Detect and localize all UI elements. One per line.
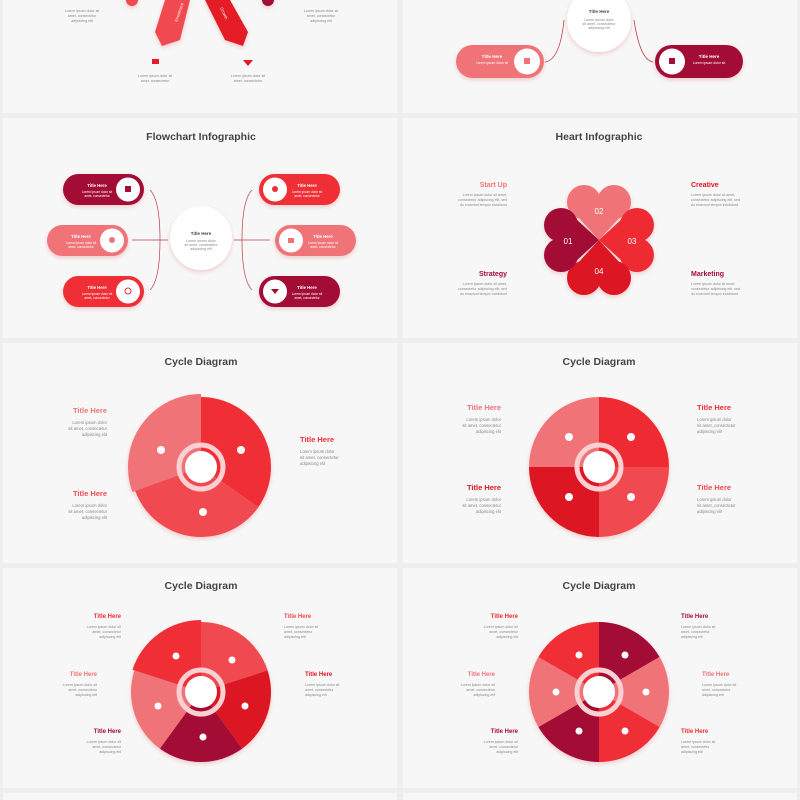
panel: ribbon top-left: Lorem ipsum dolor sit xyxy=(65,9,99,13)
panel: flowchart: Title Here xyxy=(191,231,212,236)
panel: cycle 6: Lorem ipsum dolor sit xyxy=(681,625,715,629)
panel: flowchart: amet, consectetur xyxy=(84,296,111,300)
panel: heart infographic: Lorem ipsum dolor sit amet, xyxy=(463,282,507,286)
panel: flowchart: amet, consectetur xyxy=(294,296,321,300)
icons xyxy=(152,59,159,64)
panel: cycle 3: adipiscing elit xyxy=(300,461,326,466)
title: Cycle Diagram xyxy=(563,580,635,592)
panel: ribbon top-left: adipiscing elit xyxy=(71,19,93,23)
panel: cycle 4: Lorem ipsum dolor xyxy=(697,497,732,502)
panel: top-right pills: adipiscing elit xyxy=(588,26,610,30)
panel: heart infographic: Lorem ipsum dolor sit amet, xyxy=(691,193,735,197)
panel: cycle 6: Lorem ipsum dolor sit xyxy=(484,625,518,629)
panel: cycle 5: Title Here xyxy=(305,672,333,678)
panel: cycle 3: sit amet, consectetur xyxy=(68,426,108,431)
panel: cycle 5: Title Here xyxy=(94,729,122,735)
panel: flowchart: Lorem ipsum dolor sit xyxy=(292,190,322,194)
panel: cycle 6: adipiscing elit xyxy=(681,635,703,639)
connectors xyxy=(132,190,270,290)
panel: cycle 3: Title Here xyxy=(73,406,107,415)
panel: cycle 6: Lorem ipsum dolor sit xyxy=(461,683,495,687)
heart labels: Start Up xyxy=(480,182,507,189)
panel: cycle 4: Title Here xyxy=(467,483,501,492)
panel: cycle 5: Lorem ipsum dolor sit xyxy=(284,625,318,629)
panel: cycle 3: Title Here xyxy=(73,489,107,498)
panel: heart infographic: consectetur adipiscing elit, sed xyxy=(691,287,740,291)
panel: cycle 3: adipiscing elit xyxy=(82,432,108,437)
panel: heart infographic: do eiusmod tempor incididunt xyxy=(460,292,507,296)
panel: flowchart: Lorem ipsum dolor sit xyxy=(292,292,322,296)
panel: cycle 6: Title Here xyxy=(702,672,730,678)
panel: cycle 6: adipiscing elit xyxy=(681,750,703,754)
panel: cycle 5: Title Here xyxy=(70,672,98,678)
panel: cycle 5: adipiscing elit xyxy=(99,750,121,754)
panel: ribbon top-left: Lorem ipsum dolor sit xyxy=(304,9,338,13)
panel: ribbon top-left: adipiscing elit xyxy=(310,19,332,23)
panel: cycle 4: adipiscing elit xyxy=(697,509,723,514)
panel: ribbon top-left: amet, consectetur xyxy=(141,79,170,83)
title: Cycle Diagram xyxy=(165,356,237,368)
panel: flowchart: adipiscing elit xyxy=(190,247,212,251)
panel: cycle 6: amet, consectetur xyxy=(681,745,710,749)
panel: top-right pills: sit amet, consectetur xyxy=(582,22,616,26)
panel: heart infographic: consectetur adipiscing elit, sed xyxy=(691,198,740,202)
panel: cycle 6: amet, consectetur xyxy=(489,745,519,749)
panel: top-right pills xyxy=(456,0,743,78)
panel: cycle 4: sit amet, consectetur xyxy=(697,423,736,428)
panel: ribbon top-left: Lorem ipsum dolor sit xyxy=(138,74,172,78)
panel: cycle 4: sit amet, consectetur xyxy=(462,503,502,508)
panel: cycle 6: amet, consectetur xyxy=(466,688,496,692)
panel: cycle 5: amet, consectetur xyxy=(92,630,122,634)
panel: heart infographic: do eiusmod tempor incididunt xyxy=(460,203,507,207)
panel: top-right pills: Title Here xyxy=(589,9,610,14)
panel: flowchart: Title Here xyxy=(71,234,91,239)
panel: cycle 6: Lorem ipsum dolor sit xyxy=(484,740,518,744)
panel: ribbon top-left: Investment xyxy=(173,1,185,22)
panel: ribbon top-left: Lorem ipsum dolor sit xyxy=(231,74,265,78)
panel: cycle 6: Title Here xyxy=(491,614,519,620)
panel: flowchart: sit amet, consectetur xyxy=(184,243,218,247)
panel: heart infographic: 04 xyxy=(595,267,604,276)
heart labels xyxy=(479,182,724,278)
panel: heart infographic: Lorem ipsum dolor sit amet, xyxy=(691,282,735,286)
title: Flowchart Infographic xyxy=(146,131,256,143)
panel: cycle 3: sit amet, consectetur xyxy=(300,455,339,460)
panel: flowchart: amet, consectetur xyxy=(294,194,321,198)
panel: cycle 6: Title Here xyxy=(681,614,709,620)
panel: flowchart: Title Here xyxy=(87,285,107,290)
pills xyxy=(47,174,356,307)
panel: flowchart: Lorem ipsum dolor xyxy=(186,239,217,243)
panel: cycle 6: amet, consectetur xyxy=(702,688,731,692)
panel: cycle 5: Title Here xyxy=(284,614,312,620)
heart labels: Marketing xyxy=(691,271,724,278)
panel: cycle 6: Lorem ipsum dolor sit xyxy=(702,683,736,687)
panel: flowchart: Lorem ipsum dolor sit xyxy=(66,241,96,245)
panel: cycle 6: Lorem ipsum dolor sit xyxy=(681,740,715,744)
heart labels: Strategy xyxy=(479,271,507,278)
panel: heart infographic: Lorem ipsum dolor sit amet, xyxy=(463,193,507,197)
center circle xyxy=(567,0,631,52)
panel: cycle 6: Title Here xyxy=(468,672,496,678)
panel: cycle 6: Title Here xyxy=(681,729,709,735)
panel: cycle 6: amet, consectetur xyxy=(489,630,519,634)
panel: flowchart: Title Here xyxy=(87,183,107,188)
panel: cycle 4: sit amet, consectetur xyxy=(462,423,502,428)
panel: cycle 3: Title Here xyxy=(300,435,334,444)
panel: cycle 5: adipiscing elit xyxy=(305,693,327,697)
panel: cycle 4: Lorem ipsum dolor xyxy=(466,417,502,422)
panel: flowchart: Title Here xyxy=(313,234,333,239)
panel: cycle 3: Lorem ipsum dolor xyxy=(300,449,335,454)
panel: flowchart: Lorem ipsum dolor sit xyxy=(308,241,338,245)
panel: cycle 6: adipiscing elit xyxy=(496,750,518,754)
panel: flowchart: amet, consectetur xyxy=(310,245,337,249)
panel: cycle 5: adipiscing elit xyxy=(99,635,121,639)
panel: flowchart: Title Here xyxy=(297,183,317,188)
panel: cycle 5: amet, consectetur xyxy=(284,630,313,634)
panel: cycle 5: Lorem ipsum dolor sit xyxy=(305,683,339,687)
wheel xyxy=(128,394,271,537)
panel: ribbon top-left: amet, consectetur xyxy=(234,79,263,83)
panel: heart infographic: consectetur adipiscing elit, sed xyxy=(458,198,507,202)
panel: heart infographic: 03 xyxy=(628,237,637,246)
panel: flowchart: Lorem ipsum dolor sit xyxy=(82,292,112,296)
panel: cycle 4: adipiscing elit xyxy=(476,509,502,514)
panel: cycle 3: Lorem ipsum dolor xyxy=(72,503,108,508)
panel: cycle 5: adipiscing elit xyxy=(284,635,306,639)
panel: heart infographic: do eiusmod tempor incididunt xyxy=(691,203,738,207)
panel: cycle 6 xyxy=(461,580,736,779)
wheel xyxy=(529,397,669,537)
panel: cycle 6: adipiscing elit xyxy=(702,693,724,697)
panel: flowchart: amet, consectetur xyxy=(68,245,95,249)
wheel xyxy=(508,605,690,779)
panel: cycle 5: amet, consectetur xyxy=(92,745,122,749)
panel: cycle 5: adipiscing elit xyxy=(75,693,97,697)
panel: heart infographic: 02 xyxy=(595,207,604,216)
panel: cycle 4: Title Here xyxy=(467,403,501,412)
panel: ribbon top-left xyxy=(65,0,338,83)
ribbon shapes xyxy=(126,0,274,46)
panel: cycle 5: amet, consectetur xyxy=(68,688,98,692)
panel: cycle 5 xyxy=(63,580,339,788)
panel: cycle 3: adipiscing elit xyxy=(82,515,108,520)
panel: cycle 6: adipiscing elit xyxy=(473,693,495,697)
panel: ribbon top-left: Growth xyxy=(219,6,229,20)
panel: cycle 5: Lorem ipsum dolor sit xyxy=(87,740,121,744)
panel: cycle 4: adipiscing elit xyxy=(697,429,723,434)
panel: cycle 5: amet, consectetur xyxy=(305,688,334,692)
panel: ribbon top-left: amet, consectetur xyxy=(307,14,336,18)
panel: cycle 5: Lorem ipsum dolor sit xyxy=(63,683,97,687)
title: Cycle Diagram xyxy=(563,356,635,368)
panel: top-right pills: Lorem ipsum dolor sit xyxy=(476,61,508,65)
heart clover xyxy=(544,185,654,295)
panel: cycle 6: adipiscing elit xyxy=(496,635,518,639)
panel: cycle 6: Title Here xyxy=(491,729,519,735)
panel: cycle 4: Title Here xyxy=(697,403,731,412)
panel: top-right pills: Title Here xyxy=(482,54,503,59)
panel: cycle 5: Lorem ipsum dolor sit xyxy=(87,625,121,629)
panel: cycle 3 xyxy=(68,356,339,537)
panel: cycle 4: Title Here xyxy=(697,483,731,492)
panel: cycle 3: sit amet, consectetur xyxy=(68,509,108,514)
panel: heart infographic xyxy=(458,131,740,296)
panel: heart infographic: consectetur adipiscing elit, sed xyxy=(458,287,507,291)
panel: cycle 4: adipiscing elit xyxy=(476,429,502,434)
panel: top-right pills: Lorem ipsum dolor xyxy=(584,18,615,22)
panel: cycle 6: amet, consectetur xyxy=(681,630,710,634)
pill right xyxy=(655,45,743,78)
heart labels: Creative xyxy=(691,182,719,189)
panel: cycle 4: Lorem ipsum dolor xyxy=(697,417,732,422)
title: Cycle Diagram xyxy=(165,580,237,592)
panel: ribbon top-left: amet, consectetur xyxy=(68,14,97,18)
panel: flowchart: Lorem ipsum dolor sit xyxy=(82,190,112,194)
panel: heart infographic: do eiusmod tempor incididunt xyxy=(691,292,738,296)
title: Heart Infographic xyxy=(556,131,643,143)
panel: flowchart: Title Here xyxy=(297,285,317,290)
pill left xyxy=(456,45,544,78)
panel: top-right pills: Lorem ipsum dolor sit xyxy=(693,61,725,65)
wheel xyxy=(106,605,288,788)
center circle xyxy=(170,206,232,270)
panel: heart infographic: 01 xyxy=(564,237,573,246)
panel: cycle 4 xyxy=(462,356,736,537)
panel: top-right pills: Title Here xyxy=(699,54,720,59)
panel: flowchart: amet, consectetur xyxy=(84,194,111,198)
panel: cycle 3: Lorem ipsum dolor xyxy=(72,420,108,425)
panel: cycle 4: sit amet, consectetur xyxy=(697,503,736,508)
panel: flowchart xyxy=(47,131,356,307)
panel: cycle 4: Lorem ipsum dolor xyxy=(466,497,502,502)
panel: cycle 5: Title Here xyxy=(94,614,122,620)
